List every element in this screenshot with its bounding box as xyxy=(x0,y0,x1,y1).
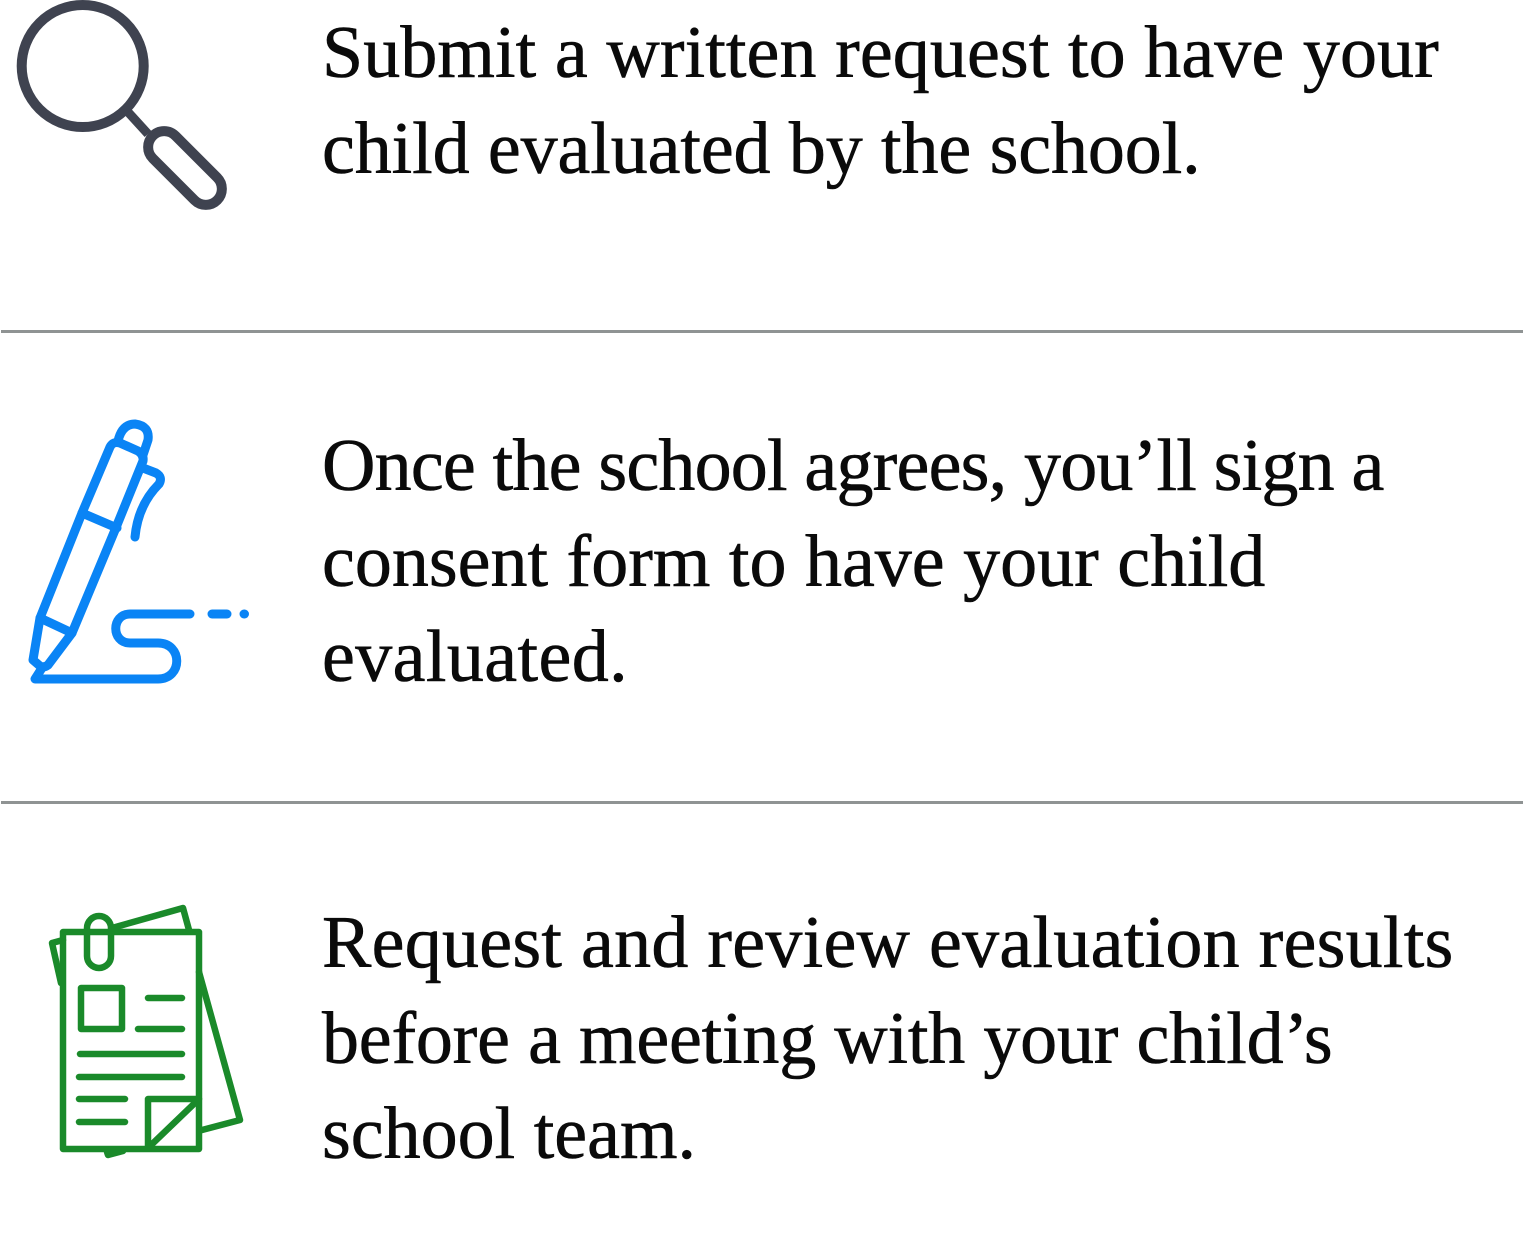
text: step 3: Request and review evaluation results xyxy=(322,902,1454,984)
text: step 1: Submit a written request to have your xyxy=(322,12,1439,94)
icon: magnifying glass xyxy=(16,0,227,210)
text: step 3: before a meeting with your child’s xyxy=(322,998,1332,1080)
text: step 1: child evaluated by the school. xyxy=(322,108,1201,190)
text: step 3 xyxy=(322,902,1454,1175)
text: step 2 xyxy=(322,425,1384,698)
text: step 2: consent form to have your child xyxy=(322,521,1265,603)
text: step 2: evaluated. xyxy=(322,616,628,698)
text: step 1 xyxy=(322,12,1439,190)
text: step 3: school team. xyxy=(322,1093,696,1175)
text: step 2: Once the school agrees, you’ll sign a xyxy=(322,425,1384,507)
icon: pen signing xyxy=(28,420,249,684)
icon: documents with paper clip xyxy=(48,904,244,1158)
